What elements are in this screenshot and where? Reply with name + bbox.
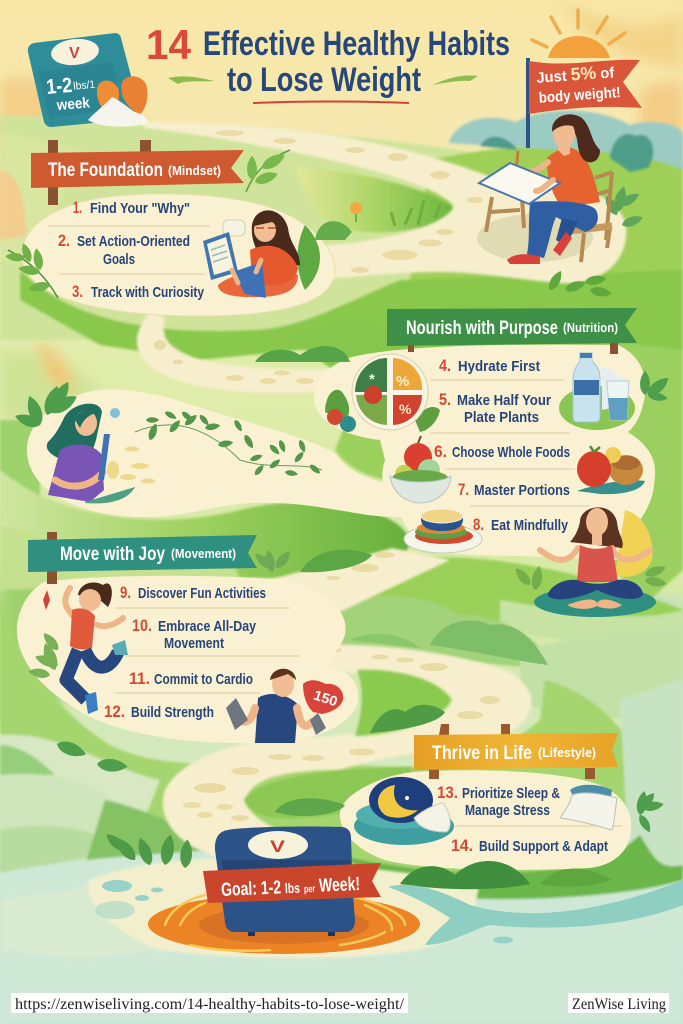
tablet	[98, 434, 110, 480]
glass	[607, 381, 629, 420]
banner posts	[47, 532, 57, 584]
blue dot	[110, 408, 120, 418]
small pillow	[414, 803, 450, 832]
leggings	[66, 650, 118, 700]
sunburst	[615, 510, 653, 577]
distant bushes behind seated woman	[449, 111, 683, 172]
water bottle and glass	[559, 353, 635, 430]
goal ribbon	[203, 863, 381, 903]
divider	[48, 225, 210, 227]
dumbbell man: 150	[312, 687, 340, 709]
head	[586, 508, 608, 536]
shirt	[48, 445, 104, 502]
sprig right of seated woman	[602, 185, 644, 229]
title line one: Effective Healthy Habits	[203, 25, 510, 63]
shoes	[507, 254, 540, 264]
stacked food	[415, 528, 473, 544]
jeans	[527, 201, 598, 258]
panel: thrive blob	[340, 770, 631, 870]
vegetables	[325, 390, 349, 422]
panel: left girl blob	[27, 389, 410, 517]
divider	[445, 468, 575, 470]
hair back	[552, 114, 600, 162]
plate diagram: %	[399, 401, 412, 417]
sign text	[45, 72, 97, 115]
small pools	[95, 880, 513, 944]
shoes	[112, 640, 128, 655]
fruit	[418, 459, 440, 481]
brand: ZenWise Living	[572, 996, 666, 1013]
road: foundation to nutrition	[137, 312, 340, 393]
item 5: Plate Plants	[464, 409, 539, 426]
sub-heading: (Movement)	[171, 546, 236, 561]
banner	[31, 150, 244, 188]
hair	[47, 404, 102, 465]
divider	[115, 607, 290, 609]
arm and pen	[516, 162, 548, 173]
divider	[470, 505, 590, 507]
title line two: to Lose Weight	[227, 61, 421, 99]
section 1	[31, 140, 244, 301]
sun	[532, 10, 625, 58]
pillow	[560, 785, 617, 830]
item 14: Build Support & Adapt	[479, 838, 608, 855]
stray leaves	[55, 738, 128, 773]
banner	[387, 308, 637, 346]
item 4: 4.	[439, 356, 451, 375]
ribbon text: Goal: 1-2 lbs per Week!	[221, 874, 361, 901]
item 2: Set Action-Oriented	[77, 233, 190, 250]
arm	[55, 472, 103, 486]
flag text	[536, 61, 621, 107]
title	[146, 21, 510, 103]
item 5	[439, 390, 551, 426]
hair	[78, 582, 112, 607]
head	[79, 589, 101, 611]
sprig right of nutrition	[640, 371, 672, 402]
mat	[534, 587, 656, 617]
road: movement to thrive and goal	[163, 644, 531, 860]
item 7: Master Portions	[474, 482, 570, 499]
goal scale	[215, 826, 355, 936]
legs	[548, 580, 643, 599]
hair back	[252, 210, 300, 270]
shirt	[250, 246, 298, 285]
plate	[404, 525, 482, 553]
item 12	[104, 702, 214, 721]
sprig by yoga woman	[512, 563, 667, 591]
grass	[559, 386, 635, 430]
sprig left of foundation	[5, 242, 58, 298]
tank top	[577, 545, 618, 582]
arms	[540, 548, 650, 560]
scale sign with carrots: V	[69, 45, 80, 62]
plate diagram: %	[396, 373, 409, 390]
banner posts	[429, 724, 595, 779]
bowl	[421, 515, 463, 531]
towel	[88, 97, 148, 127]
apple	[577, 451, 611, 487]
plate diagram	[325, 354, 440, 432]
item 10: Movement	[164, 635, 224, 652]
hair	[570, 507, 623, 548]
item 6	[434, 442, 570, 461]
item 11: 11.	[129, 669, 150, 688]
heading: Thrive in Life	[432, 743, 532, 764]
left girl with sprig	[47, 404, 322, 503]
leaf sprig	[135, 410, 322, 477]
teal plate	[577, 480, 645, 494]
plants left of scale	[103, 831, 193, 869]
splash	[43, 590, 50, 610]
road stepping stones	[154, 130, 500, 821]
item 6: Choose Whole Foods	[452, 444, 570, 461]
road: nutrition to movement	[270, 548, 450, 640]
goal rug	[148, 894, 420, 954]
river	[388, 880, 683, 945]
flag	[526, 58, 642, 148]
item 13: 13.	[437, 783, 458, 802]
item 3: 3.	[72, 282, 83, 301]
source url: https://zenwiseliving.com/14-healthy-habits-to-lose-weight/	[15, 996, 405, 1013]
item 5: 5.	[439, 390, 451, 409]
divider	[430, 379, 565, 381]
head	[553, 121, 575, 147]
item 9	[120, 583, 266, 602]
road: start to seated woman	[140, 122, 626, 283]
divider	[60, 273, 205, 275]
head	[75, 410, 97, 436]
sprig beside move banner	[252, 548, 372, 573]
top	[70, 608, 95, 649]
sprig right of thrive	[635, 790, 664, 834]
item 14	[451, 836, 608, 855]
heading: Nourish with Purpose	[406, 318, 558, 339]
bush in lower island	[275, 798, 345, 816]
flag pole	[526, 58, 530, 148]
bottom sand	[88, 858, 480, 958]
item 2: Goals	[103, 251, 135, 268]
bush above nutrition	[255, 346, 350, 362]
seated woman journaling	[477, 114, 612, 264]
heading: The Foundation	[48, 160, 163, 181]
leaves	[28, 630, 61, 679]
flower in island	[315, 200, 440, 240]
sprig near foundation banner	[246, 150, 290, 192]
bushes under thrive	[400, 861, 612, 889]
sign text: lbs/1	[73, 79, 96, 93]
sign text: week	[55, 94, 91, 114]
item 11: Commit to Cardio	[154, 671, 253, 688]
laptop leaf	[85, 487, 135, 503]
goal scale: V	[270, 837, 286, 856]
night sphere	[369, 777, 433, 823]
heading: Move with Joy	[60, 544, 165, 565]
item 2	[58, 231, 190, 268]
item 10	[132, 616, 257, 652]
item 9: Discover Fun Activities	[138, 585, 266, 602]
sub-heading: (Lifestyle)	[538, 745, 596, 760]
item 9: 9.	[120, 583, 131, 602]
item 2: 2.	[58, 231, 70, 250]
lemon	[605, 447, 621, 463]
banner	[28, 535, 257, 572]
divider	[115, 692, 260, 694]
head	[272, 671, 294, 697]
dial	[248, 831, 308, 859]
item 12: Build Strength	[131, 704, 214, 721]
item 5: Make Half Your	[457, 392, 551, 409]
arms	[65, 588, 123, 626]
item 1	[73, 198, 190, 217]
bush inside road bend	[370, 705, 445, 733]
title underline	[253, 102, 409, 103]
item 10: 10.	[132, 616, 152, 635]
divider	[430, 432, 570, 434]
divider	[455, 825, 622, 827]
bowl	[390, 476, 451, 503]
panel: nutrition blob	[314, 345, 655, 560]
pastries	[609, 455, 643, 485]
item 13: Prioritize Sleep &	[462, 785, 560, 802]
plate diagram: *	[369, 371, 375, 388]
dumbbell man	[226, 669, 343, 743]
carrots	[97, 80, 119, 115]
carton	[602, 365, 625, 410]
section 3	[28, 532, 300, 721]
scale body	[215, 826, 355, 932]
item 1: 1.	[73, 198, 82, 217]
item 7: 7.	[458, 480, 469, 499]
torso	[547, 148, 600, 208]
apple	[404, 443, 432, 471]
bottle	[573, 353, 600, 422]
item 3	[72, 282, 205, 301]
green leaf	[298, 225, 320, 290]
item 4: Hydrate First	[458, 358, 540, 375]
yoga woman	[534, 507, 656, 617]
banner posts	[48, 140, 151, 205]
item 8: Eat Mindfully	[491, 517, 569, 534]
item 8	[473, 515, 569, 534]
skirt	[218, 271, 298, 297]
section 2	[387, 308, 637, 534]
sprig below seated woman	[546, 269, 612, 298]
item 10: Embrace All-Day	[158, 618, 257, 635]
stacked plate	[404, 509, 482, 553]
notebook	[479, 163, 560, 204]
divider	[125, 655, 300, 657]
winding road	[88, 122, 626, 958]
moon on cushions	[354, 777, 454, 845]
book	[233, 262, 266, 298]
reading woman	[203, 210, 320, 298]
sub-heading: (Nutrition)	[563, 320, 618, 335]
feet	[567, 599, 622, 609]
banner posts	[408, 342, 618, 354]
arms	[236, 708, 312, 726]
item 13: Manage Stress	[465, 802, 550, 819]
sign board	[28, 33, 140, 127]
apple and pastries	[577, 446, 645, 494]
item 4	[439, 356, 540, 375]
cream panels	[17, 194, 655, 870]
item 6: 6.	[434, 442, 447, 461]
item 1: Find Your "Why"	[90, 200, 190, 217]
plate	[352, 354, 428, 430]
fruit bowl	[390, 436, 451, 503]
plant sprigs	[5, 150, 672, 889]
speech bubble	[223, 220, 245, 236]
flag text: body weight!	[538, 84, 621, 107]
tablet	[203, 232, 238, 280]
feet	[248, 932, 335, 936]
section 4	[414, 724, 622, 855]
bush behind girl	[13, 379, 80, 430]
item 3: Track with Curiosity	[91, 284, 205, 301]
dumbbells	[226, 698, 248, 730]
title number: 14	[146, 21, 192, 68]
flag cloth	[529, 60, 642, 114]
sign text: 1-2	[45, 74, 73, 99]
flag text: Just 5% of	[536, 61, 616, 87]
heart badge	[303, 680, 343, 714]
trail stones	[107, 446, 155, 484]
item 7	[458, 480, 570, 499]
jumping woman	[28, 582, 128, 714]
item 13	[437, 783, 560, 819]
bushes above road	[350, 621, 548, 665]
head	[254, 218, 276, 242]
dial	[50, 37, 100, 67]
item 14: 14.	[451, 836, 473, 855]
green islands between road bends	[244, 166, 453, 818]
panel: movement blob	[17, 576, 358, 743]
sub-heading: (Mindset)	[168, 163, 221, 178]
cushions	[354, 807, 454, 845]
title swashes	[168, 75, 478, 85]
chair	[486, 172, 612, 262]
banner	[414, 733, 618, 770]
panel: foundation blob	[22, 194, 335, 316]
shadow	[477, 214, 593, 262]
item 11	[129, 669, 253, 688]
scale sign with carrots	[28, 33, 148, 127]
item 8: 8.	[473, 515, 484, 534]
torso	[255, 694, 298, 743]
item 12: 12.	[104, 702, 125, 721]
